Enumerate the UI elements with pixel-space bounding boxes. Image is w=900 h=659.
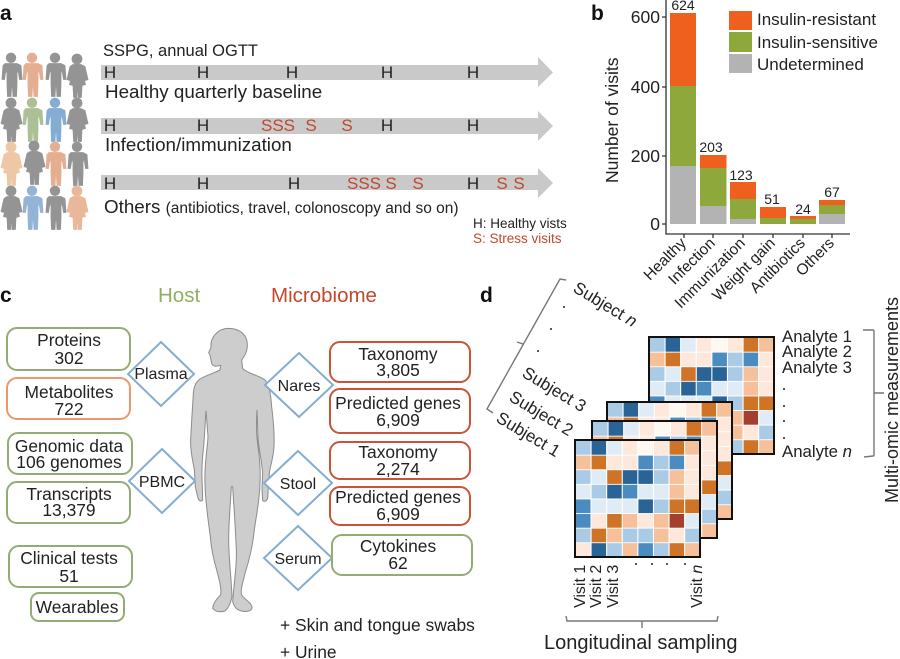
y axis title: Number of visits: [602, 57, 622, 183]
panel letter b: b: [591, 2, 604, 25]
box: metabolites: 722: [54, 399, 84, 419]
arrow: others timeline: S: [412, 174, 424, 193]
label: longitudinal sampling: Longitudinal sampling: [544, 632, 737, 654]
x category labels: Antibiotics: [747, 235, 809, 297]
subject labels: Subject 1: [493, 408, 563, 461]
box: clinical tests: 51: [59, 566, 79, 586]
box: genomic data: [8, 433, 132, 474]
bar value labels: 123: [729, 167, 753, 183]
heading: microbiome: Microbiome: [271, 284, 377, 307]
heatmap stack: [575, 337, 774, 557]
visit labels: Visit n: [689, 565, 706, 608]
legend: visit types: [473, 216, 567, 246]
box: predicted genes nares: Predicted genes: [335, 393, 461, 413]
x category labels: Infection: [665, 235, 719, 288]
x category labels: Others: [793, 235, 838, 280]
arrow: infection timeline: SSS: [261, 116, 295, 135]
panel b: stacked bar chart of visits: [591, 0, 878, 312]
axes: 200: [631, 146, 660, 166]
arrow: others timeline: H: [197, 174, 209, 193]
label: others: Others (antibiotics, travel, colonoscopy and so on): [104, 196, 459, 217]
icon: human body: [191, 328, 274, 612]
diamond: plasma: [128, 342, 194, 406]
legend: Insulin-resistant: [757, 10, 876, 29]
panel c: host and microbiome measurements: [0, 284, 475, 659]
panel letter a: a: [0, 2, 12, 25]
subject bracket: [487, 279, 566, 413]
arrow: others timeline: [101, 168, 553, 198]
box: transcripts: 13,379: [42, 500, 96, 520]
box: transcripts: Transcripts: [26, 484, 112, 504]
box: cytokines: [332, 535, 472, 575]
subject labels: Subject n: [570, 278, 641, 331]
analyte labels: [782, 327, 852, 461]
analyte labels: Analyte 2: [782, 342, 852, 361]
visit labels: Visit 3: [605, 565, 622, 608]
arrow: others timeline: H: [288, 174, 300, 193]
box: taxonomy 2,274: Taxonomy: [358, 442, 438, 462]
label: healthy quarterly baseline: Healthy quarterly baseline: [105, 81, 322, 102]
panel letter d: d: [480, 284, 493, 307]
arrow: healthy baseline timeline: H: [381, 63, 393, 82]
bar value labels: 203: [699, 139, 723, 155]
diamond: nares: [265, 353, 333, 417]
box: clinical tests: [9, 546, 132, 587]
subject labels: Subject 2: [506, 387, 576, 440]
arrow: infection timeline: S: [305, 116, 317, 135]
arrow: healthy baseline timeline: H: [104, 63, 116, 82]
subject labels: Subject 3: [519, 363, 589, 416]
arrow: others timeline: H: [467, 174, 479, 193]
box: metabolites: [7, 378, 130, 419]
box: wearables: [31, 593, 124, 621]
arrow: infection timeline: H: [104, 116, 116, 135]
diamond: stool: [264, 451, 332, 515]
bar value labels: 24: [795, 201, 811, 217]
x category labels: Weight gain: [709, 235, 779, 305]
box: predicted genes stool: 6,909: [376, 504, 420, 524]
legend: visit types: S: Stress visits: [473, 231, 562, 246]
box: transcripts: [7, 482, 130, 523]
legend: Undetermined: [757, 55, 864, 74]
visit labels: Visit 2: [588, 565, 605, 608]
box: genomic data: Genomic data: [15, 436, 123, 456]
bars: [670, 13, 845, 224]
panel letter c: c: [0, 284, 12, 307]
box: taxonomy 2,274: [330, 442, 470, 479]
legend: Insulin-sensitive: [757, 33, 878, 52]
box: taxonomy 3,805: Taxonomy: [358, 344, 438, 364]
timeline heading: SSPG, annual OGTT: [103, 42, 258, 60]
box: cytokines: 62: [388, 553, 408, 573]
legend: [729, 10, 878, 74]
icon: group of participants: [1, 53, 88, 230]
arrow: infection timeline: [101, 111, 553, 141]
diamond: serum: Serum: [274, 551, 322, 568]
box: taxonomy 3,805: 3,805: [376, 360, 420, 380]
analyte labels: Analyte 3: [782, 358, 852, 377]
heading: host: Host: [158, 284, 200, 307]
legend: visit types: H: Healthy vists: [473, 216, 567, 231]
axes: 400: [631, 77, 660, 97]
arrow: healthy baseline timeline: H: [467, 63, 479, 82]
arrow: infection timeline: S: [341, 116, 353, 135]
arrow: infection timeline: H: [381, 116, 393, 135]
box: predicted genes nares: [330, 389, 470, 433]
note: other samples: + Skin and tongue swabs: [280, 615, 475, 635]
x category labels: [641, 235, 838, 312]
analyte labels: Analyte 1: [782, 327, 852, 346]
visit bracket: [566, 616, 718, 628]
axes: 600: [631, 7, 660, 27]
arrow: healthy baseline timeline: [101, 57, 553, 87]
arrow: others timeline: S: [513, 174, 525, 193]
x category labels: Immunization: [672, 235, 749, 312]
box: taxonomy 2,274: 2,274: [376, 459, 420, 479]
axes: 0: [650, 214, 660, 234]
axes: [631, 0, 850, 238]
subject labels: [493, 278, 641, 461]
panel d: multi-omic data cube: [480, 278, 900, 654]
arrow: others timeline: S: [385, 174, 397, 193]
arrow: healthy baseline timeline: H: [197, 63, 209, 82]
diamond: nares: Nares: [278, 378, 320, 395]
diamond: PBMC: PBMC: [139, 474, 185, 491]
box: proteins: Proteins: [37, 330, 101, 350]
box: predicted genes nares: 6,909: [376, 410, 420, 430]
diamond: serum: [264, 526, 332, 590]
box: metabolites: Metabolites: [25, 382, 114, 402]
box: wearables: Wearables: [36, 597, 119, 617]
diamond: PBMC: [129, 449, 195, 513]
arrow: infection timeline: H: [467, 116, 479, 135]
visit labels: [572, 563, 706, 608]
bar value labels: 51: [764, 191, 780, 207]
panel a: study design timelines: [0, 2, 567, 246]
arrow: infection timeline: H: [197, 116, 209, 135]
box: cytokines: Cytokines: [360, 536, 436, 556]
box: genomic data: 106 genomes: [16, 452, 122, 472]
analyte labels: Analyte n: [782, 442, 852, 461]
bar value labels: [671, 0, 840, 217]
box: taxonomy 3,805: [330, 342, 470, 382]
label: infection/immunization: Infection/immunization: [105, 134, 292, 155]
note: other samples: [280, 615, 475, 659]
box: predicted genes stool: [330, 487, 470, 525]
box: predicted genes stool: Predicted genes: [335, 487, 461, 507]
x category labels: Healthy: [641, 235, 690, 284]
arrow: others timeline: S: [496, 174, 508, 193]
analyte bracket: [863, 330, 884, 457]
arrow: others timeline: H: [104, 174, 116, 193]
arrow: healthy baseline timeline: H: [286, 63, 298, 82]
visit labels: Visit 1: [572, 565, 589, 608]
diamond: plasma: Plasma: [134, 366, 188, 383]
box: clinical tests: Clinical tests: [20, 548, 118, 568]
box: proteins: [7, 328, 130, 370]
box: proteins: 302: [54, 348, 84, 368]
bar value labels: 67: [824, 184, 840, 200]
diamond: stool: Stool: [280, 476, 316, 493]
arrow: others timeline: SSS: [347, 174, 381, 193]
